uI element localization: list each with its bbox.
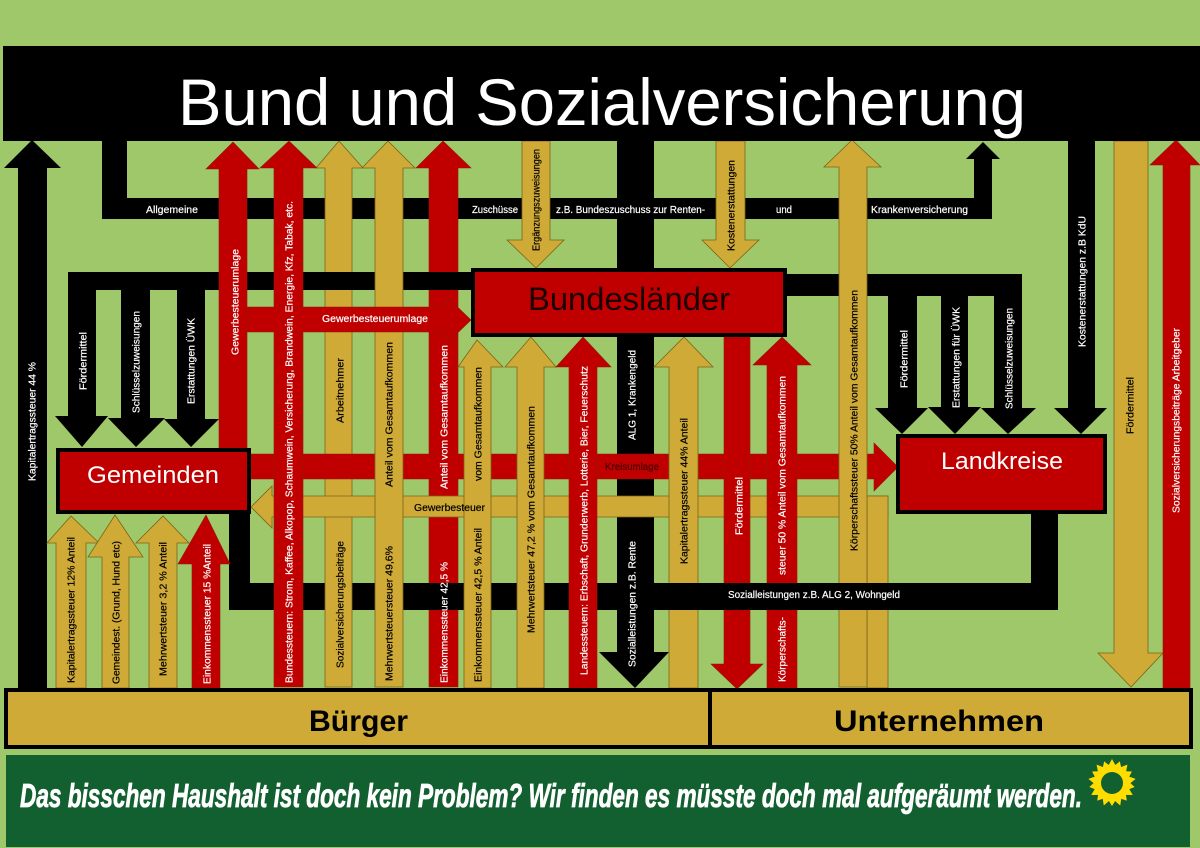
label: Kapitalertragssteuer 44% Anteil: Kapitalertragssteuer 44% Anteil [680, 418, 690, 564]
label: Gewerbesteuer: Gewerbesteuer [414, 503, 486, 514]
arrow: Einkommensteuer to Bund [416, 141, 471, 687]
label: Krankenversicherung: Krankenversicherung [871, 205, 968, 216]
arrow: Kapitalertragsteuer to Bund [4, 140, 61, 688]
label: und: und [776, 205, 792, 216]
arrow: Ergänzungszuweisungen [507, 141, 564, 268]
box: Gemeinden [58, 450, 249, 512]
label: Mehrwertsteuer 3,2 % Anteil: Mehrwertsteuer 3,2 % Anteil [158, 542, 170, 676]
label: Einkommensteuer 15 % Anteil: Einkommenssteuer 15 %Anteil [202, 544, 214, 684]
connector: Allgemeine Zuschüsse to Krankenversicherung [102, 141, 1000, 219]
box: Unternehmen: Unternehmen [834, 705, 1044, 738]
arrow: Bundessteuern [260, 141, 317, 687]
label: Sozialversicherungsbeiträge: Sozialversicherungsbeiträge [336, 541, 346, 668]
arrow: ALG and Sozialleistungen [599, 141, 669, 688]
label: Anteil vom Gesamtaufkommen gold: Anteil vom Gesamtaufkommen [384, 342, 396, 487]
banner [6, 755, 1190, 847]
arrow: Mehrwertsteuer to Bund [362, 141, 415, 687]
label: Fördermittel right: Fördermittel [900, 330, 910, 388]
arrow: Körperschaftssteuer to Bundesländer [753, 337, 811, 688]
label: Kreisumlage: Kreisumlage [605, 462, 659, 473]
arrow: Gewerbesteuerumlage vertical [206, 142, 259, 448]
label: Schlüsselzuweisungen left: Schlüsselzuweisungen [132, 311, 142, 413]
label: Sozialleistungen Rente: Sozialleistungen z.B. Rente [628, 541, 638, 667]
label: Allgemeine: Allgemeine [146, 205, 198, 216]
label: Einkommenssteuer 42,5 %: Einkommenssteuer 42,5 % [440, 562, 450, 683]
box: Landkreise [898, 436, 1105, 512]
bar: Sozialleistungen right part [664, 514, 1058, 610]
icon: sunflower [1087, 759, 1137, 807]
label: Bundeszuschuss: z.B. Bundeszuschuss zur Renten- [556, 205, 705, 216]
label: Kapitalertragsteuer 44 %: Kapitalertragssteuer 44 % [28, 362, 38, 481]
arrow: Kostenerstattungen z.B. KdU [1054, 141, 1107, 434]
arrow: Einkommensteuer to Bundesländer [458, 340, 503, 688]
box: Bürger: Bürger [309, 705, 408, 738]
label: Sozialleistungen Landkreise: Sozialleistungen z.B. ALG 2, Wohngeld [728, 590, 900, 601]
label: Gewerbesteuerumlage vertical: Gewerbesteuerumlage [230, 249, 242, 355]
title bar: Bund und Sozialversicherung [178, 65, 1026, 139]
arrow: Gemeindesteuer [88, 515, 143, 688]
label: Gewerbesteuerumlage horizontal: Gewerbesteuerumlage [322, 314, 428, 325]
label: Mehrwertsteuer 47,2 %: Mehrwertsteuer 47,2 % vom Gesamtaufkommen [526, 406, 538, 633]
bar: Gewerbesteuer extension to Unternehmen [867, 496, 888, 688]
arrow: Gewerbesteuerumlage horizontal [247, 296, 471, 344]
label: Fördermittel gold: Fördermittel [1126, 377, 1136, 434]
bar: Sozialleistungen left part [229, 514, 669, 610]
box: Unternehmen [710, 690, 1191, 747]
label: Fördermittel red: Fördermittel [734, 477, 746, 535]
label: Anteil vom Gesamtaufkommen red: Anteil vom Gesamtaufkommen [440, 345, 450, 489]
label: Körperschaftssteuer 50%: Körperschaftssteuer 50% Anteil vom Gesamtaufkommen [850, 290, 860, 551]
bus: Bundesländer to Gemeinden with three arrows [55, 272, 480, 447]
box: Bürger [6, 690, 710, 747]
label: Kostenerstattungen z.B KdU: Kostenerstattungen z.B KdU [1078, 216, 1088, 347]
label: Zuschüsse: Zuschüsse [472, 205, 518, 216]
bus: Bundesländer to Landkreise with three arrows [780, 274, 1036, 434]
label: Sozialversicherungsbeiträge Arbeitgeber: Sozialversicherungsbeiträge Arbeitgeber [1172, 327, 1182, 513]
arrow: Kapitalertragssteuer to Bundesländer [654, 337, 713, 688]
box: Bundesländer [473, 270, 785, 335]
arrow: Mehrwertsteuer to Bundesländer [505, 337, 556, 688]
label: Arbeitnehmer: Arbeitnehmer [336, 357, 346, 423]
label: Kapitalertragssteuer 12% Anteil: Kapitalertragssteuer 12% Anteil [66, 537, 78, 683]
box: Bundesländer: Bundesländer [528, 281, 730, 317]
label: Bundessteuern: Bundessteuern: Strom, Kaffee, Alkopop, Schaumwein, Versicherung, Brandwein, Energie, Kfz, Tabak, etc. [284, 201, 296, 683]
label: Einkommenssteuer 42,5 % Anteil: Einkommenssteuer 42,5 % Anteil [474, 528, 484, 682]
arrow: Mehrwertsteuer to Gemeinden [136, 516, 189, 688]
label: Körperschafts-: Körperschafts- [778, 617, 788, 682]
arrow: Fördermittel from Bund to Unternehmen [1098, 141, 1163, 687]
label: ALG 1, Krankengeld: ALG 1, Krankengeld [628, 350, 638, 440]
arrow: Körperschaftssteuer to Bund [824, 140, 881, 687]
label: Gemeindest.: Gemeindest. (Grund, Hund etc) [112, 541, 122, 684]
arrow: Landessteuern [556, 337, 611, 688]
box: Gemeinden: Gemeinden [87, 462, 219, 489]
label: Kostenerstattungen: Kostenerstattungen [726, 160, 738, 251]
label: Ergänzungszuweisungen: Ergänzungszuweisungen [532, 149, 542, 251]
title bar [3, 46, 1200, 141]
arrow: Gewerbesteuer [251, 486, 888, 528]
arrow: Kostenerstattungen to Bundesländer [702, 141, 759, 268]
arrow: Kapitalertragssteuer to Gemeinden [47, 516, 99, 688]
arrow: Einkommensteuer to Gemeinden [178, 515, 230, 688]
arrow: Arbeitnehmer Sozialversicherung [316, 141, 363, 687]
label: Schlüsselzuweisungen right: Schlüsselzuweisungen [1004, 308, 1016, 409]
label: Fördermittel left: Fördermittel [78, 332, 90, 390]
arrow: Fördermittel from Bundesländer [711, 335, 763, 689]
label: Mehrwertsteuer 49,6%: Mehrwertsteuersteuer 49,6% [384, 546, 396, 681]
arrow: Kreisumlage [251, 443, 898, 491]
box: Landkreise: Landkreise [941, 448, 1063, 475]
arrow: Sozialversicherungsbeiträge Arbeitgeber [1150, 140, 1200, 688]
label: Landessteuern: Landessteuern: Erbschaft, Grunderwerb, Lotterie, Bier, Feuerschutz [580, 366, 590, 675]
label: vom Gesamtaufkommen: vom Gesamtaufkommen [474, 367, 484, 481]
label: Erstattungen ÜWK: Erstattungen ÜWK [186, 318, 198, 404]
label: steuer 50 % Anteil: steuer 50 % Anteil vom Gesamtaufkommen [778, 376, 788, 575]
label: Erstattungen für ÜWK: Erstattungen für ÜWK [950, 307, 962, 408]
